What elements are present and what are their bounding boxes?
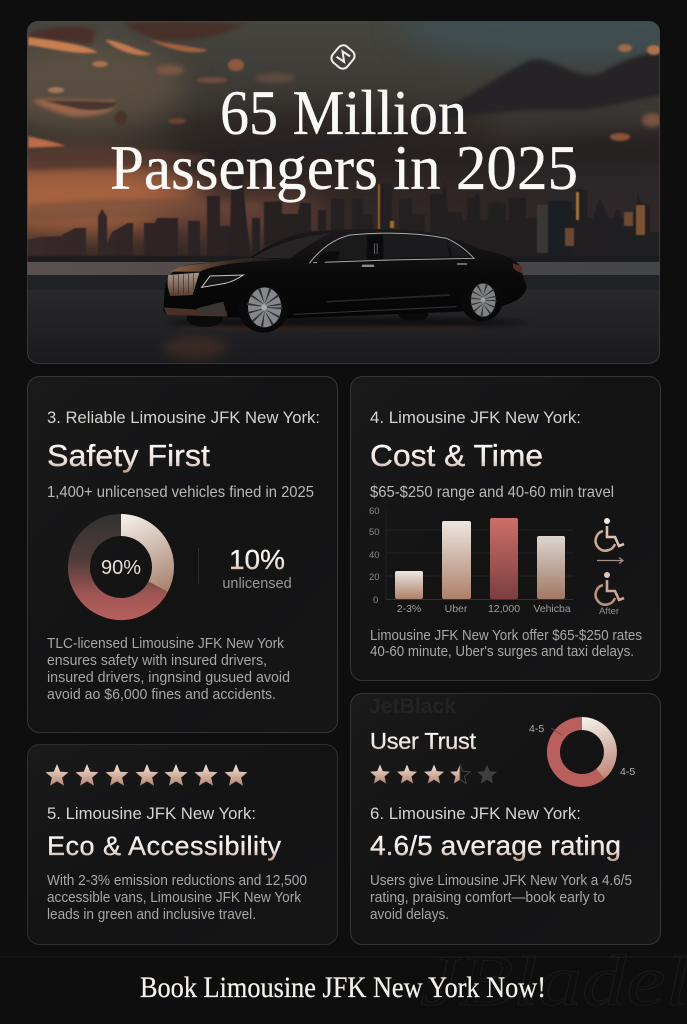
- watermark signature: JBladel: [420, 941, 687, 1021]
- donut chart: 90% licensed: [79, 525, 163, 609]
- subheading: $65-$250 range and 40-60 min travel: [370, 484, 614, 501]
- panel: eco and accessibility: [28, 744, 338, 944]
- car body: [163, 229, 527, 318]
- donut chart: rating: 4-5: [529, 723, 544, 735]
- hero panel: limousine at sunset over skyline: [27, 21, 660, 363]
- heading: Eco & Accessibility: [47, 831, 282, 861]
- title: [110, 78, 578, 203]
- body text: [370, 628, 642, 660]
- bar chart: 60: [369, 506, 380, 517]
- stat heading: 4.6/5 average rating: [370, 830, 621, 861]
- body text: avoid ao $6,000 fines and accidents.: [47, 687, 276, 703]
- body text: [47, 873, 307, 923]
- heading: Cost & Time: [370, 438, 543, 473]
- chrome trim: [309, 233, 474, 263]
- stat: 10% unlicensed: 10%: [229, 544, 285, 575]
- headlight: [202, 275, 243, 287]
- body text: ensures safety with insured drivers,: [47, 653, 267, 669]
- body text: rating, praising comfort—book early to: [370, 890, 605, 906]
- panel: user trust: [350, 694, 660, 944]
- section label: 6. Limousine JFK New York:: [370, 804, 581, 823]
- bar chart: Uber: [445, 603, 468, 615]
- stat: 10% unlicensed: [222, 544, 292, 592]
- bar chart: 50: [369, 527, 380, 538]
- icon: arrow: [597, 558, 623, 564]
- far-side wheels: [186, 316, 224, 327]
- bar chart: 0: [373, 595, 378, 606]
- bar chart: 20: [369, 572, 380, 583]
- windows: [253, 233, 330, 259]
- body text: [370, 873, 632, 923]
- body text: insured drivers, ingnsind gusued avoid: [47, 670, 290, 686]
- rear wheel: [464, 306, 502, 322]
- title: 65 Million: [220, 78, 467, 148]
- donut chart: 90% licensed: 90%: [101, 557, 141, 579]
- body text: 40-60 minute, Uber's surges and taxi delays.: [370, 644, 634, 660]
- body text: accessible vans, Limousine JFK New York: [47, 890, 302, 906]
- bar chart: 12,000: [488, 603, 520, 615]
- panel: safety first: [28, 376, 338, 732]
- star rating: [370, 764, 497, 784]
- bar chart: Vehicba: [533, 603, 571, 615]
- body text: With 2-3% emission reductions and 12,500: [47, 873, 307, 889]
- icon: wheelchair before: [596, 518, 624, 551]
- sky: [27, 21, 660, 262]
- front wheel: [240, 318, 286, 332]
- body text: avoid delays.: [370, 907, 449, 923]
- icon: limousine: [163, 229, 527, 333]
- body text: TLC-licensed Limousine JFK New York: [47, 636, 285, 652]
- title: Passengers in 2025: [110, 133, 578, 203]
- icon: wheelchair after: After: [599, 606, 619, 617]
- section label: 3. Reliable Limousine JFK New York:: [47, 408, 320, 427]
- call to action: Book Limousine JFK New York Now!: [140, 971, 546, 1004]
- bar chart: [369, 506, 573, 615]
- body text: Users give Limousine JFK New York a 4.6/5: [370, 873, 632, 889]
- hood highlight: [171, 258, 290, 272]
- faded brand text: JetBlack: [369, 695, 456, 718]
- body text: [47, 636, 290, 703]
- icon: wheelchair after: [596, 572, 624, 617]
- donut chart: rating: 4-5: [620, 766, 635, 778]
- star row: [46, 764, 247, 786]
- icon: logo: [330, 44, 356, 70]
- heading: user trust: User Trust: [370, 728, 476, 754]
- section label: 4. Limousine JFK New York:: [370, 408, 581, 427]
- section label: 5. Limousine JFK New York:: [47, 804, 256, 823]
- bar chart: 2-3%: [397, 603, 421, 615]
- subheading: 1,400+ unlicensed vehicles fined in 2025: [47, 484, 314, 501]
- body text: Limousine JFK New York offer $65-$250 rates: [370, 628, 642, 644]
- body text: leads in green and inclusive travel.: [47, 907, 256, 923]
- clouds: [28, 21, 665, 222]
- bar chart: 40: [369, 550, 380, 561]
- stat: 10% unlicensed: unlicensed: [222, 576, 292, 592]
- skyline: [28, 176, 660, 262]
- donut chart: rating: [529, 723, 635, 780]
- water, sea wall and road: [27, 262, 660, 364]
- grille: [168, 273, 199, 296]
- panel: cost and time: [350, 376, 660, 680]
- heading: Safety First: [47, 438, 210, 473]
